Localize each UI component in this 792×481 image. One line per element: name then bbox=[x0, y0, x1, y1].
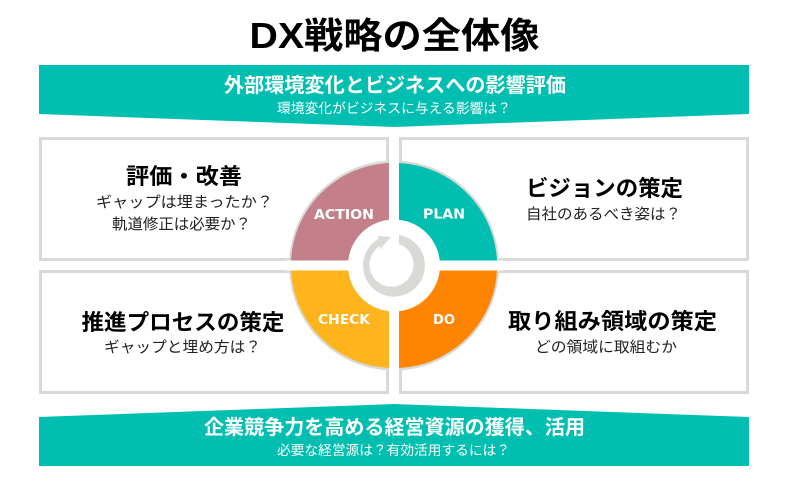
segment: PLAN bbox=[399, 163, 497, 260]
segment: DO bbox=[399, 270, 497, 368]
segment: CHECK: CHECK bbox=[318, 313, 371, 328]
segment: ACTION bbox=[291, 163, 389, 260]
panel text: course correction: 軌道修正は必要か？ bbox=[112, 216, 251, 233]
top banner subheading: 環境変化がビジネスに与える影響は？ bbox=[277, 101, 511, 116]
segment: DO: DO bbox=[433, 313, 455, 328]
panel text: vision question: 自社のあるべき姿は？ bbox=[526, 206, 681, 223]
bottom banner heading: 企業競争力を高める経営資源の獲得、活用 bbox=[204, 416, 585, 439]
panel text: focus question: どの領域に取組むか bbox=[535, 339, 677, 356]
bottom banner subheading: 必要な経営源は？有効活用するには？ bbox=[277, 443, 510, 458]
top banner bbox=[39, 65, 749, 127]
segment: PLAN: PLAN bbox=[423, 208, 465, 222]
panel heading: evaluation: 評価・改善 bbox=[126, 164, 242, 189]
segment: ACTION: ACTION bbox=[314, 208, 374, 223]
panel: promotion process bbox=[40, 272, 388, 392]
panel: focus areas bbox=[400, 272, 748, 392]
panel text: process question: ギャップと埋め方は？ bbox=[104, 339, 261, 356]
PDCA cycle diagram bbox=[285, 155, 503, 377]
panel heading: process: 推進プロセスの策定 bbox=[82, 310, 284, 335]
panel: vision bbox=[400, 138, 748, 260]
panel heading: focus areas: 取り組み領域の策定 bbox=[508, 309, 717, 334]
segment: CHECK bbox=[291, 270, 389, 368]
title: DX戦略の全体像 bbox=[250, 15, 540, 56]
panel text: gap question: ギャップは埋まったか？ bbox=[96, 194, 273, 211]
top banner heading: 外部環境変化とビジネスへの影響評価 bbox=[224, 74, 566, 97]
icon: circular arrow bbox=[363, 235, 425, 297]
panel: evaluation and improvement bbox=[40, 138, 388, 260]
bottom banner bbox=[39, 404, 749, 466]
panel heading: vision: ビジョンの策定 bbox=[526, 176, 683, 201]
